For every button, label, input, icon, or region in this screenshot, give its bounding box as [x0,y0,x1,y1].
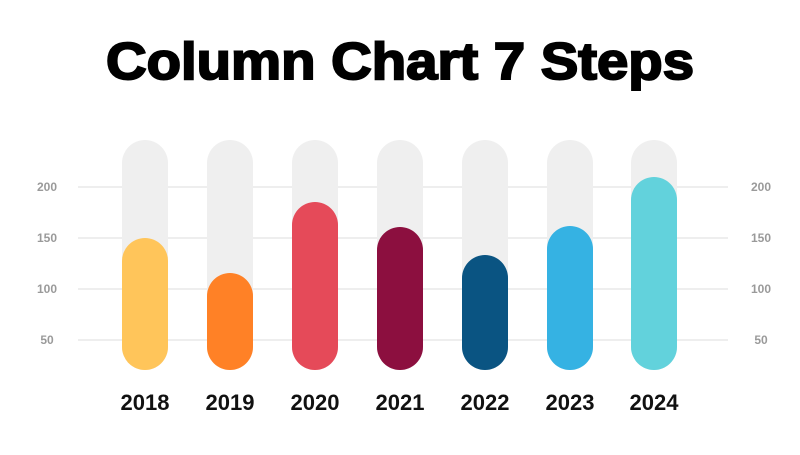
year labels: 2024 [630,390,679,415]
right axis labels: 200 [751,180,771,194]
right axis labels: 50 [754,333,768,347]
year labels: 2023 [546,390,594,415]
year labels: 2018 [121,390,169,415]
bar 2018 [122,238,168,370]
year labels [121,390,679,415]
right axis labels: 150 [751,231,771,245]
bar 2020 [292,202,338,370]
year labels: 2020 [291,390,339,415]
left axis labels: 150 [37,231,57,245]
right axis labels: 100 [751,282,771,296]
left axis labels [37,180,57,347]
left axis labels: 100 [37,282,57,296]
year labels: 2022 [461,390,509,415]
chart [37,140,771,415]
year labels: 2019 [206,390,254,415]
year labels: 2021 [376,390,424,415]
left axis labels: 200 [37,180,57,194]
background pills [122,140,677,370]
bar 2023 [547,226,593,370]
bar 2022 [462,255,508,370]
right axis labels [751,180,771,347]
left axis labels: 50 [40,333,54,347]
bar 2021 [377,227,423,370]
bar 2024 [631,177,677,370]
title: Column Chart 7 Steps [106,33,694,91]
bar 2019 [207,273,253,370]
